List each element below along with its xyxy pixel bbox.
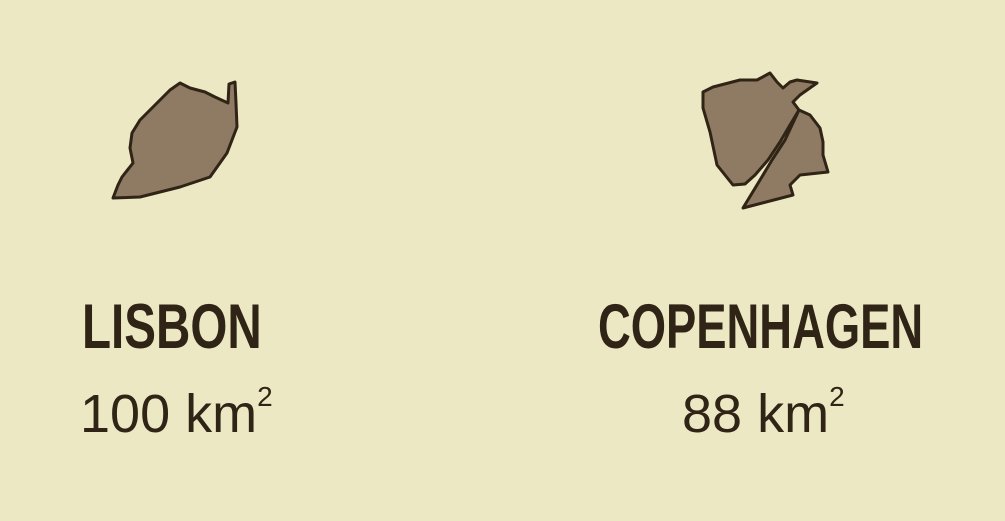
label: Copenhagen area: 88 km2 [682, 381, 845, 444]
label: Lisbon name: LISBON [82, 292, 262, 362]
label: Copenhagen name: COPENHAGEN [598, 292, 923, 362]
label: Lisbon area: 100 km2 [80, 381, 273, 444]
